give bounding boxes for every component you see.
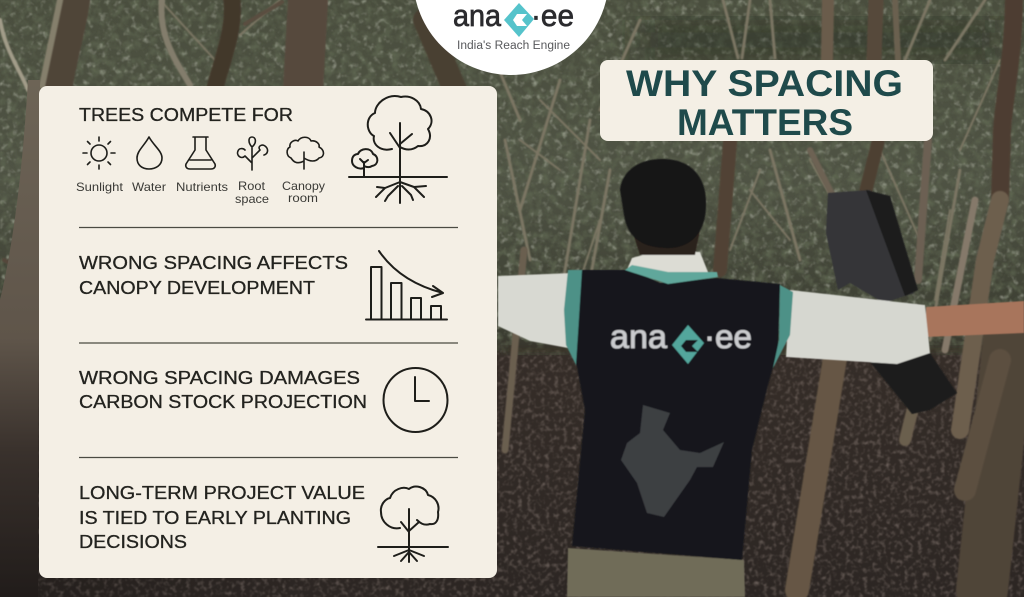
vest logo: ·ee: [704, 318, 752, 355]
icon: clock: [384, 368, 448, 432]
right sleeve: [786, 290, 930, 364]
head: [620, 159, 706, 255]
top-right trunks: [827, 0, 828, 60]
India map on vest: [621, 405, 724, 517]
icon: canopy: [287, 137, 324, 169]
left sleeve: [498, 273, 572, 348]
person seen from behind with arms spread: [498, 159, 1024, 597]
icon: sun: [83, 137, 115, 169]
top-left trunks: [56, 0, 74, 90]
text: IS TIED TO EARLY PLANTING: [79, 507, 351, 528]
icon: flask: [186, 137, 215, 169]
text: WRONG SPACING AFFECTS: [79, 252, 348, 273]
vest logo: ana: [610, 318, 668, 355]
heading: TREES COMPETE FOR: [79, 104, 293, 125]
label: water: Water: [132, 180, 166, 194]
icon: water drop: [137, 137, 162, 169]
right forearm: [926, 301, 1024, 337]
label: root space: [235, 179, 269, 206]
label: root space: space: [235, 192, 269, 206]
title: MATTERS: [677, 102, 853, 143]
teal vest collar: [625, 265, 718, 284]
label: sunlight: Sunlight: [76, 180, 124, 194]
logo badge: India's Reach Engine: [457, 40, 570, 52]
text: [79, 252, 348, 298]
icon: declining bar chart: [366, 251, 447, 320]
hanging dark jacket: [826, 190, 957, 414]
label: canopy room: room: [288, 191, 318, 205]
section: canopy development: [79, 251, 447, 320]
section: carbon stock: [79, 367, 448, 432]
vest logo: [610, 318, 752, 364]
icon: tree with roots: [378, 487, 448, 562]
vest: [566, 270, 780, 560]
text: LONG-TERM PROJECT VALUE: [79, 482, 365, 503]
text: [79, 367, 367, 412]
icon: root space: [238, 137, 268, 170]
label: root space: Root: [238, 179, 266, 193]
title: [600, 60, 933, 143]
label: nutrients: Nutrients: [176, 180, 228, 194]
section: long-term value: [79, 482, 448, 562]
text: WRONG SPACING DAMAGES: [79, 367, 360, 388]
mid trunks: [720, 142, 730, 270]
teal right armhole trim: [773, 285, 793, 368]
logo badge: [413, 0, 609, 75]
label: canopy room: [282, 179, 325, 205]
text: [79, 482, 365, 552]
text: CARBON STOCK PROJECTION: [79, 391, 367, 412]
trousers: [567, 548, 745, 597]
teal left armhole trim: [564, 270, 582, 365]
foreground trunks: [797, 340, 838, 590]
title: WHY SPACING: [626, 63, 903, 104]
panel: reasons spacing matters: [39, 86, 497, 578]
shirt collar: [626, 250, 708, 272]
label: canopy room: Canopy: [282, 179, 325, 193]
large left trunk: [0, 80, 40, 597]
text: CANOPY DEVELOPMENT: [79, 277, 315, 298]
section: trees compete for: [76, 96, 447, 206]
text: DECISIONS: [79, 531, 187, 552]
icon: large and small tree with roots: [349, 96, 447, 203]
